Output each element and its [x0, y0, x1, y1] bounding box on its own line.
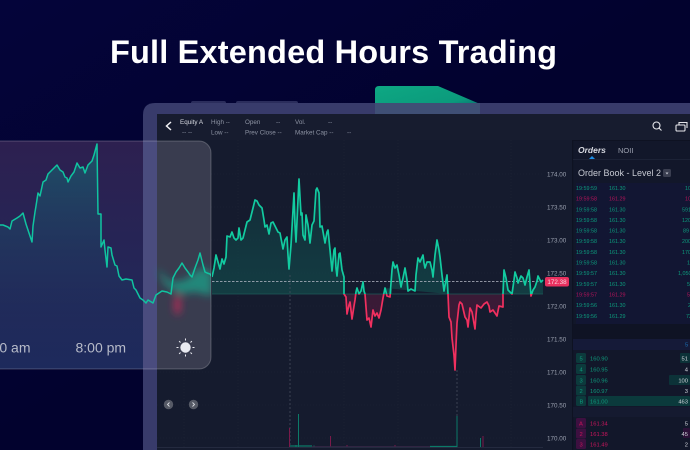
price axis: 170.00 — [547, 436, 567, 442]
level 2 book: 160.96 — [590, 378, 608, 384]
icon: back chevron — [166, 122, 171, 130]
order book heading: Order Book - Level 2 — [578, 168, 661, 178]
trade tape: 161.30 — [609, 239, 626, 245]
level 2 book: 45 — [682, 432, 688, 438]
device frame — [143, 101, 690, 450]
level 2 book: 100 — [678, 378, 688, 384]
blurred chart behind glass — [157, 268, 212, 315]
icon: search — [653, 122, 662, 130]
level 2 book — [573, 324, 690, 449]
ask rows — [573, 407, 690, 417]
area below baseline — [346, 294, 502, 354]
trade tape — [576, 183, 690, 324]
level 2 book: 161.34 — [590, 422, 609, 428]
trade tape: 19:59:58 — [576, 196, 597, 202]
trade tape: 19:59:58 — [576, 218, 597, 224]
trade tape: 19:59:58 — [576, 250, 597, 256]
line rising — [212, 178, 544, 294]
time label pm: 8:00 pm — [76, 340, 126, 356]
level 2 book: 160.90 — [590, 356, 608, 362]
glass time panel — [0, 141, 212, 369]
header stats: Low -- — [211, 130, 228, 136]
header bar — [157, 114, 690, 140]
trade tape: 19:59:58 — [576, 208, 597, 214]
price axis: 173.50 — [547, 204, 567, 212]
level 2 book: 5 — [580, 356, 583, 362]
header stats: -- — [276, 119, 280, 126]
trade tape: 161.30 — [609, 303, 626, 309]
price axis: 170.50 — [547, 402, 567, 410]
header stats: Market Cap -- — [295, 130, 334, 136]
level 2 book: 161.38 — [590, 432, 608, 438]
crosshair lines — [290, 275, 457, 447]
header stats — [182, 119, 351, 136]
price axis: 174.00 — [547, 172, 567, 178]
tab: Orders: Orders — [578, 145, 606, 155]
level 2 book: 161.49 — [590, 442, 608, 448]
equity name: Equity A — [180, 119, 204, 126]
tab: NOII: NOII — [618, 146, 633, 155]
nav buttons — [164, 400, 198, 409]
bid rows — [576, 353, 586, 406]
panel chart area — [0, 150, 118, 278]
dropdown — [663, 169, 671, 177]
trade tape: 161.30 — [609, 218, 626, 224]
trade tape: 161.30 — [609, 228, 626, 234]
volume bars — [157, 414, 543, 448]
price axis: 171.50 — [547, 336, 567, 344]
trade tape: 19:59:57 — [576, 271, 597, 277]
level 2 book: 2 — [580, 389, 583, 395]
price axis: 172.00 — [547, 304, 567, 310]
icon: sun — [176, 338, 194, 356]
header stats: Prev Close -- — [245, 130, 282, 136]
app screen — [157, 114, 690, 450]
header stats: Vol. — [295, 119, 306, 126]
title: Full Extended Hours Trading — [110, 34, 557, 70]
line falling — [343, 294, 532, 371]
tab indicator — [589, 156, 595, 159]
level 2 book: 5 — [685, 342, 688, 348]
price chart — [212, 179, 544, 447]
trade tape: 19:59:58 — [576, 228, 597, 234]
level 2 book: 160.97 — [590, 389, 608, 395]
trade tape: 5 — [687, 282, 690, 288]
price axis: 171.00 — [547, 370, 567, 376]
order panel — [572, 140, 690, 450]
level 2 book: 463 — [678, 400, 688, 406]
trade tape: 19:59:56 — [576, 314, 597, 320]
level 2 book: 161.00 — [590, 400, 608, 406]
teal accent shape behind device — [375, 86, 480, 114]
trade tape: 1 — [687, 260, 690, 266]
trade tape: 161.30 — [609, 186, 626, 192]
header stats: -- — [347, 130, 351, 136]
header stats: -- -- — [182, 129, 192, 136]
area above baseline — [212, 191, 543, 294]
price axis: 173.00 — [547, 238, 567, 244]
level 2 book: 3 — [685, 389, 688, 395]
trade tape: 161.30 — [609, 260, 626, 266]
header stats: High -- — [211, 119, 230, 126]
trade tape: 19:59:57 — [576, 292, 597, 298]
level 2 book: 4 — [685, 368, 689, 374]
trade tape: 19:59:58 — [576, 239, 597, 245]
level 2 book: B — [580, 400, 584, 406]
trade tape: 161.30 — [609, 250, 626, 256]
level 2 book: A — [579, 422, 583, 428]
glass border — [0, 141, 211, 369]
trade tape: 161.29 — [609, 314, 626, 320]
chart grid — [157, 140, 543, 447]
level 2 book: 5 — [685, 422, 688, 428]
header stats: Open — [245, 119, 261, 126]
price tag: 172.38 — [547, 279, 567, 286]
level 2 book: 3 — [580, 378, 583, 384]
trade tape: 19:59:57 — [576, 282, 597, 288]
level 2 book: 4 — [580, 368, 584, 374]
trade tape: 161.30 — [609, 271, 626, 277]
trade tape: 161.29 — [609, 292, 626, 298]
trade tape: 161.30 — [609, 208, 626, 214]
current price line — [212, 281, 542, 282]
icon: layout — [676, 122, 687, 131]
level 2 book: 3 — [580, 442, 583, 448]
level 2 book: 2 — [685, 442, 688, 448]
trade tape: 161.30 — [609, 282, 626, 288]
price tag — [545, 277, 569, 286]
level 2 book: 160.95 — [590, 368, 608, 374]
price axis — [547, 172, 567, 442]
price axis: 172.50 — [547, 270, 567, 278]
trade tape: 5 — [687, 292, 690, 298]
trade tape: 19:59:59 — [576, 186, 597, 192]
trade tape: 161.29 — [609, 196, 626, 202]
level 2 book: 51 — [682, 356, 688, 362]
header stats: -- — [328, 119, 332, 126]
trade tape: 19:59:56 — [576, 303, 597, 309]
level 2 book: 2 — [580, 432, 583, 438]
panel chart line — [0, 144, 212, 303]
baseline — [212, 294, 543, 295]
depth bars — [680, 353, 690, 363]
trade tape: 19:59:58 — [576, 260, 597, 266]
trade tape: 89 — [683, 228, 689, 234]
